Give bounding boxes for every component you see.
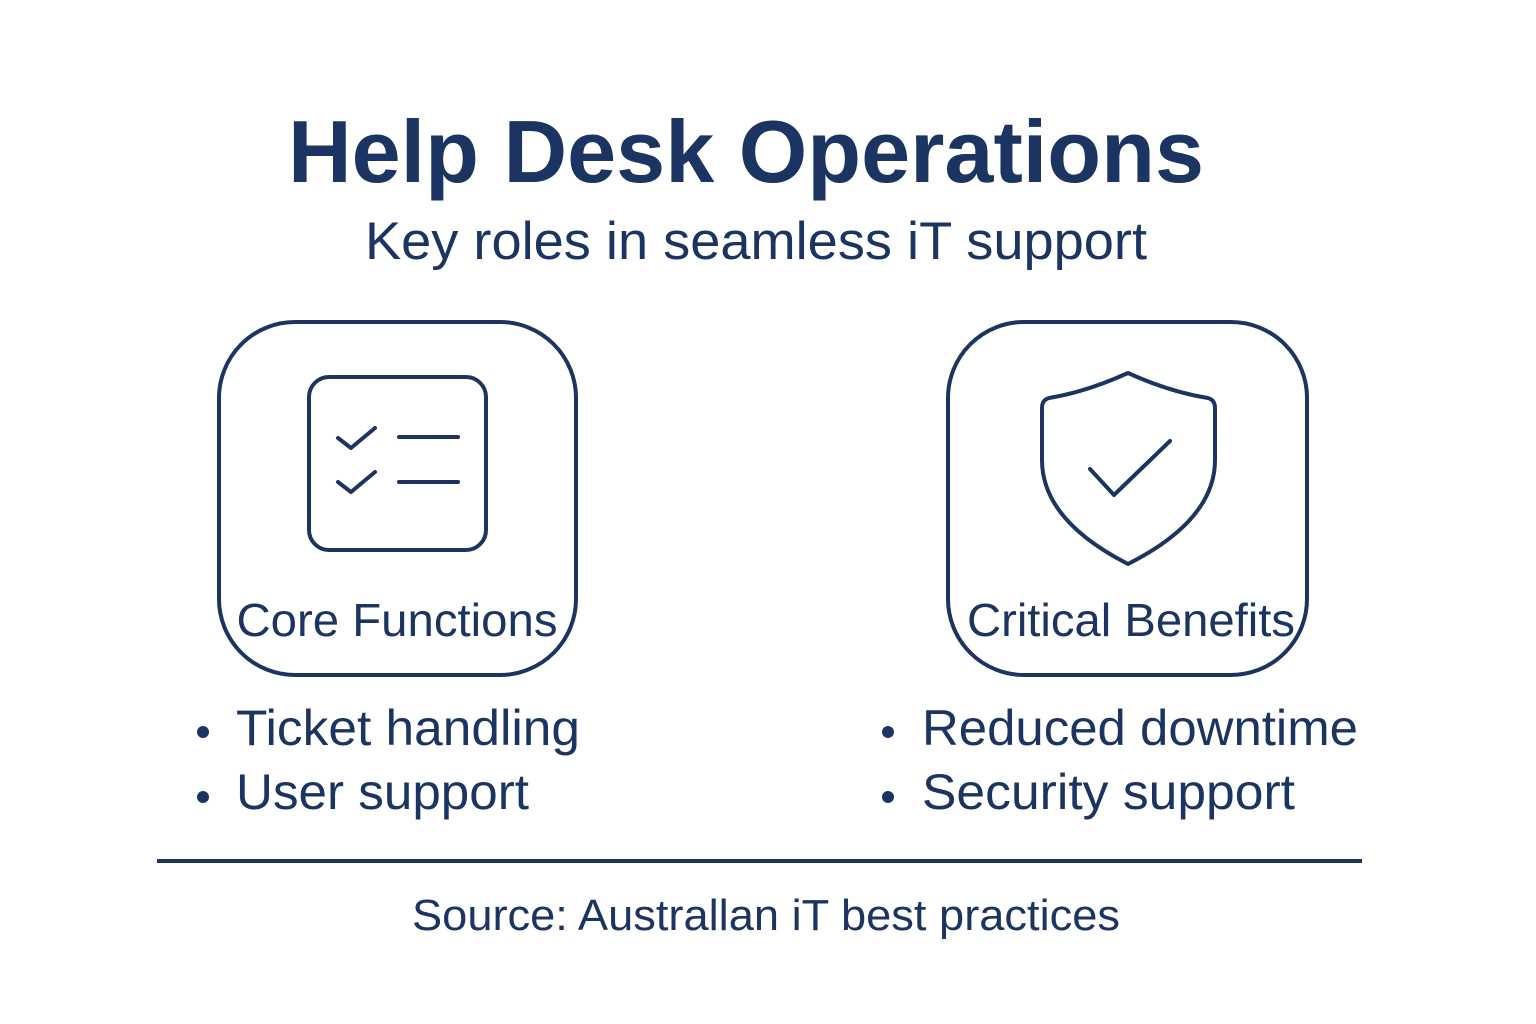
list: core functions: Ticket handling	[236, 700, 580, 756]
list: critical benefits: Security support	[922, 764, 1295, 820]
label: critical benefits: Critical Benefits	[967, 594, 1295, 646]
icon: shield	[1042, 373, 1215, 564]
panel: core functions	[219, 322, 576, 675]
list: core functions	[197, 700, 580, 820]
list: critical benefits	[882, 700, 1358, 820]
panel: critical benefits	[948, 322, 1307, 675]
list: critical benefits: Reduced downtime	[922, 700, 1358, 756]
list: core functions: User support	[236, 764, 529, 820]
source note: Source: Australlan iT best practices	[412, 891, 1120, 940]
icon: checklist	[309, 377, 486, 550]
title: Help Desk Operations	[288, 102, 1204, 201]
label: core functions: Core Functions	[236, 594, 558, 646]
subtitle: Key roles in seamless iT support	[365, 212, 1147, 271]
